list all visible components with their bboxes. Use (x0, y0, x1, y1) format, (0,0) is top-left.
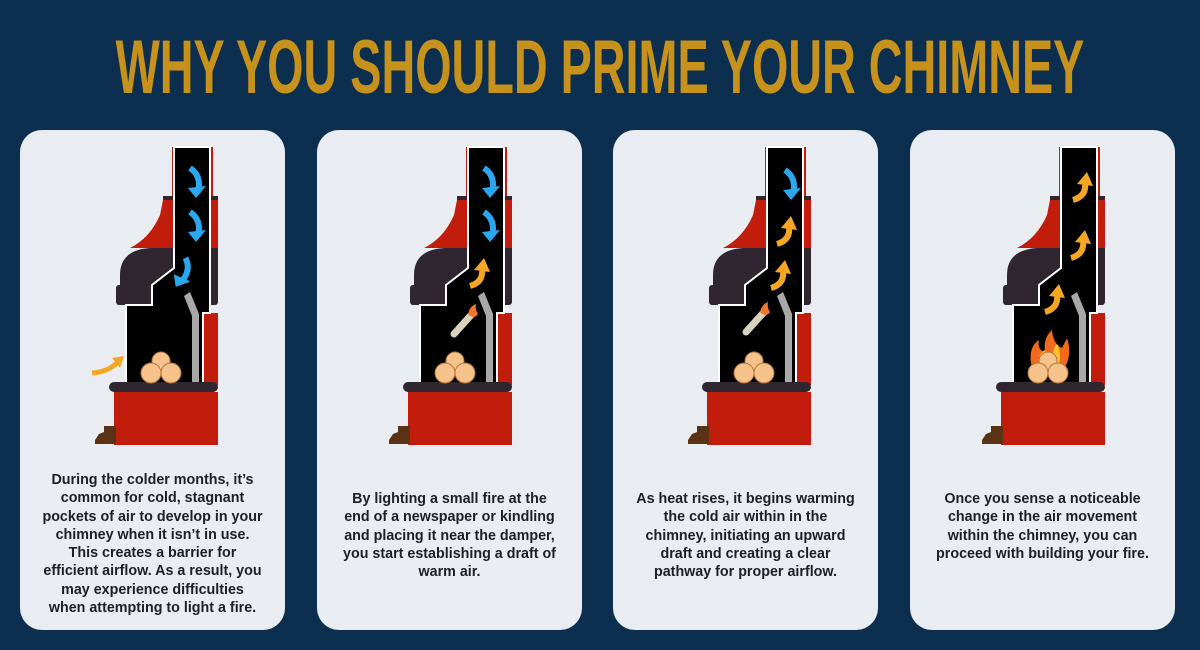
panel: build fire (910, 130, 1175, 630)
illustration: chimney 1 cold air (92, 147, 218, 445)
arrows: warming draft (771, 170, 801, 288)
illustration: chimney 2 small fire (389, 147, 512, 445)
arrows: mixed draft (470, 168, 500, 286)
icon: lit newspaper (454, 304, 478, 334)
panel: cold air pockets (20, 130, 285, 630)
panel: light small fire (317, 130, 582, 630)
panel: heat rises (613, 130, 878, 630)
icon: fire (1031, 330, 1069, 370)
text: step 3: As heat rises, it begins warming the cold air within in the chimney, initiating an upward draft and creating a clear pathway for proper airflow. (636, 491, 855, 580)
illustration: chimney 3 heat rises (688, 147, 811, 445)
arrows: cold air down (169, 168, 206, 292)
text: step 2: By lighting a small fire at the end of a newspaper or kindling and placing it near the damper, you start establishing a draft of warm air. (343, 491, 556, 580)
arrows: up draft (1045, 172, 1093, 312)
text: step 4: Once you sense a noticeable change in the air movement within the chimney, you can proceed with building your fire. (936, 491, 1149, 562)
icon: lit newspaper (746, 302, 770, 332)
illustration: chimney 4 fire (982, 147, 1105, 445)
title: WHY YOU SHOULD PRIME YOUR CHIMNEY (116, 25, 1084, 110)
text: step 1: During the colder months, it’s common for cold, stagnant pockets of air to develop in your chimney when it isn’t in use. This creates a barrier for efficient airflow. As a result, you may experience difficulties when attempting to light a fire. (42, 472, 263, 616)
arrow: incoming air (92, 356, 124, 373)
